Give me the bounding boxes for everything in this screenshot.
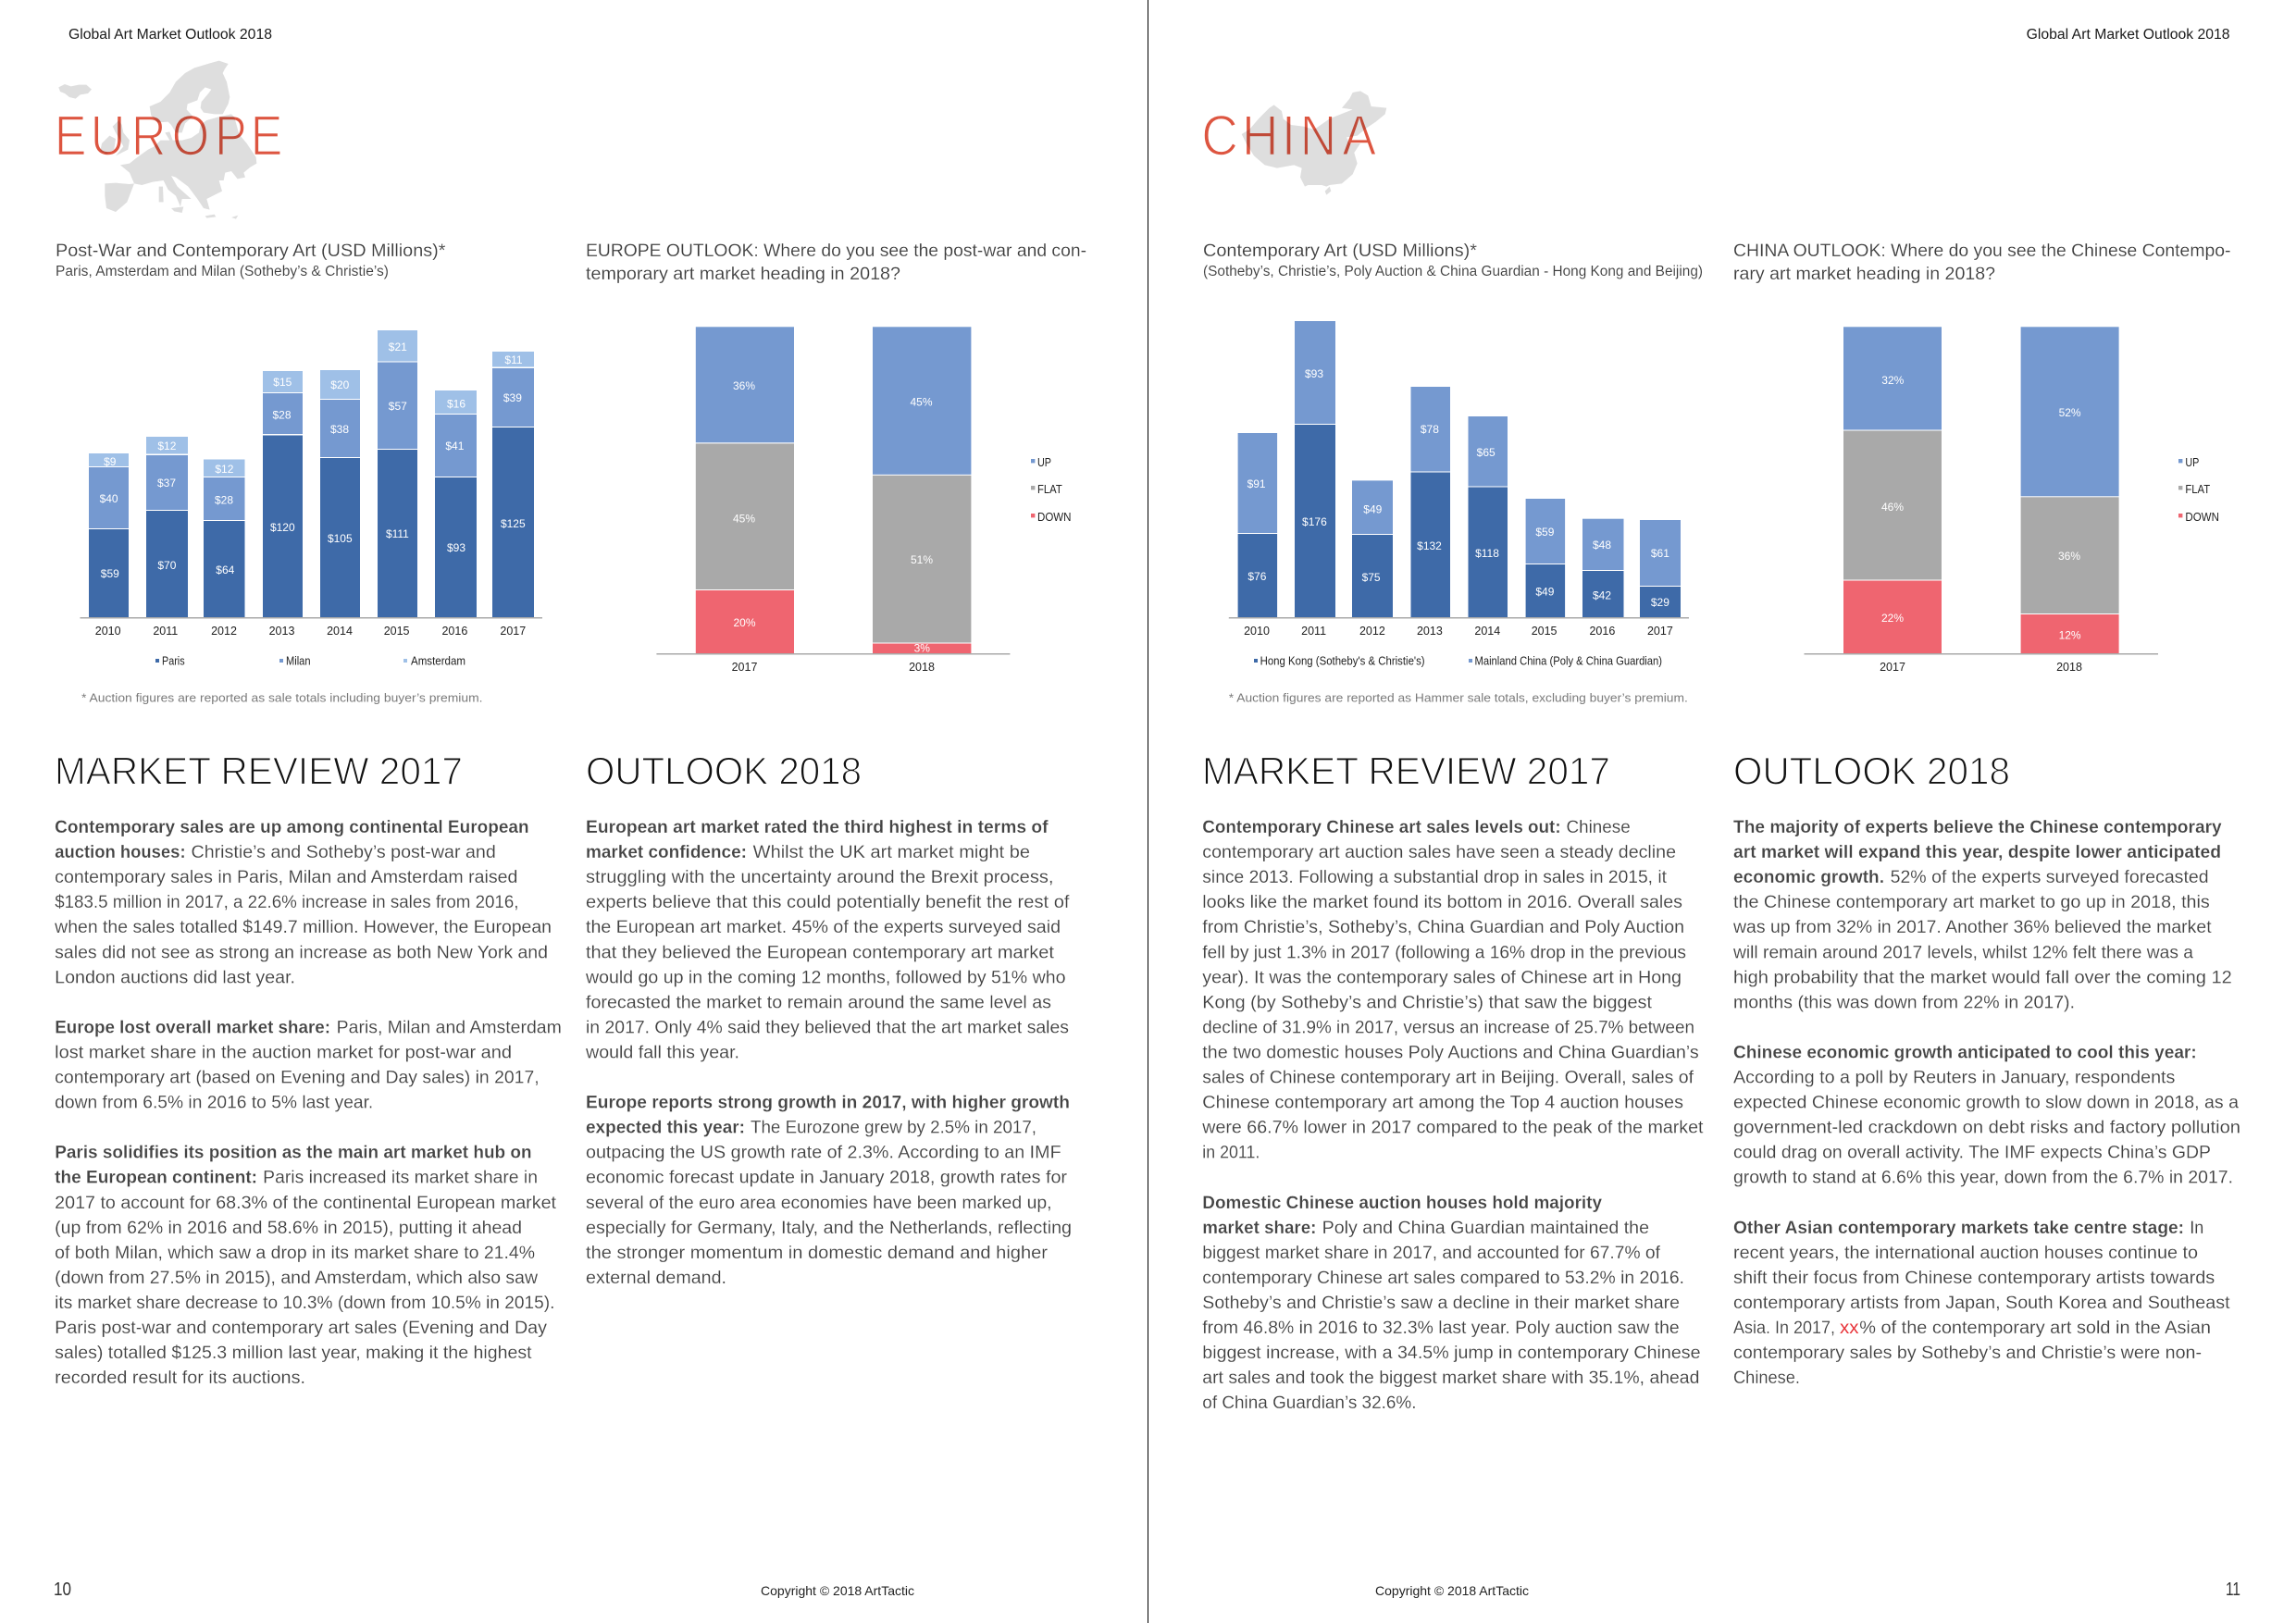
- legend: [2178, 456, 2219, 524]
- x axis with years: 2017: [1647, 625, 1673, 638]
- bar 2012: [1352, 480, 1393, 617]
- running header: Global Art Market Outlook 2018: [68, 27, 272, 43]
- paragraph: strong growth: [586, 1094, 1072, 1288]
- stacked bar chart: Europe sales by city: [80, 330, 542, 668]
- x axis with years: 2016: [1589, 625, 1615, 638]
- bar 2010: $40: [100, 492, 118, 505]
- paragraph: market confidence: the European art market. 45% of the experts surveyed said: [586, 918, 1061, 937]
- paragraph: domestic houses: from 46.8% in 2016 to 32.3% last year. Poly auction saw the: [1202, 1319, 1680, 1338]
- bar 2017: $29: [1651, 596, 1669, 609]
- bar 2018: 3%: [914, 642, 930, 655]
- bar 2010: $91: [1247, 477, 1266, 490]
- x axis with years: [1229, 617, 1689, 638]
- text block: China market review: [1201, 818, 1704, 1413]
- paragraph: majority of experts: was up from 32% in 2017. Another 36% believed the market: [1732, 918, 2212, 937]
- title: China: CHINA: [1201, 105, 1376, 167]
- paragraph: majority of experts: months (this was down from 22% in 2017).: [1733, 993, 2075, 1012]
- paragraph: sales level out: [1201, 818, 1704, 1163]
- paragraph: market confidence: struggling with the uncertainty around the Brexit process,: [586, 868, 1053, 887]
- x axis with years: 2011: [153, 625, 178, 638]
- running header: Global Art Market Outlook 2018: [2027, 27, 2230, 43]
- paragraph: domestic houses: biggest increase, with a 34.5% jump in contemporary Chinese: [1202, 1344, 1701, 1363]
- legend: DOWN: [2185, 511, 2219, 524]
- paragraph: Paris position: Paris solidifies its position as the main art market hub on: [55, 1144, 532, 1163]
- text block: China outlook: [1732, 818, 2240, 1388]
- bar 2017: 45%: [733, 512, 755, 525]
- page number 11: 11: [2226, 1580, 2240, 1600]
- bar 2017: [1640, 520, 1681, 617]
- paragraph: Paris position: [55, 1144, 557, 1388]
- paragraph: other Asian markets: xx: [1840, 1319, 1859, 1338]
- bar 2011: $37: [157, 477, 176, 489]
- bar 2017: $11: [504, 353, 523, 366]
- x axis with years: 2013: [1417, 625, 1443, 638]
- paragraph: Paris position: of both Milan, which saw a drop in its market share to 21.4%: [55, 1244, 535, 1263]
- x axis with years: 2018: [909, 661, 935, 674]
- bar 2017: 20%: [733, 616, 756, 629]
- bar 2014: [1468, 416, 1508, 617]
- paragraph: lost market share: Paris, Milan and Amsterdam: [337, 1018, 562, 1037]
- paragraph: contemporary sales: [54, 818, 552, 987]
- legend: DOWN: [1037, 511, 1072, 524]
- x axis with years: 2012: [211, 625, 237, 638]
- bar 2015: $21: [389, 341, 407, 353]
- paragraph: sales level out: Chinese: [1566, 818, 1631, 837]
- bar 2012: $64: [216, 564, 235, 576]
- bar 2015: $111: [386, 527, 409, 540]
- legend: UP: [2185, 456, 2199, 469]
- chart heading: Europe outlook: EUROPE OUTLOOK: Where do you see the post-war and con-: [586, 241, 1086, 261]
- paragraph: other Asian markets: contemporary sales by Sotheby’s and Christie’s were non-: [1733, 1344, 2202, 1363]
- bar 2014: $65: [1477, 446, 1496, 459]
- legend: Paris: [162, 655, 185, 668]
- chart heading: contemporary art: [1203, 241, 1703, 279]
- paragraph: majority of experts: high probability that the market would fall over the coming 12: [1733, 968, 2232, 987]
- bar 2016: $41: [445, 440, 465, 452]
- paragraph: contemporary sales: auction houses:: [55, 843, 186, 862]
- footnote: * Auction figures are reported as Hammer sale totals, excluding buyer’s premium.: [1229, 690, 1688, 705]
- bar 2011: $70: [157, 559, 177, 572]
- paragraph: strong growth: The Eurozone grew by 2.5% in 2017,: [751, 1119, 1036, 1138]
- chart heading: Europe outlook: [586, 241, 1086, 284]
- bar 2017: $125: [501, 517, 526, 530]
- bar 2014: [320, 370, 360, 617]
- bar 2016: [1582, 519, 1623, 617]
- paragraph: domestic houses: Domestic Chinese auction houses hold majority: [1202, 1194, 1602, 1213]
- icon: map of China: [1242, 91, 1386, 195]
- paragraph: market confidence: that they believed the European contemporary art market: [586, 943, 1055, 962]
- legend: UP: [1037, 456, 1051, 469]
- paragraph: Paris position: (up from 62% in 2016 and 58.6% in 2015), putting it ahead: [55, 1219, 522, 1238]
- paragraph: Paris position: its market share decrease to 10.3% (down from 10.5% in 2015).: [55, 1294, 554, 1313]
- paragraph: contemporary sales: sales did not see as strong an increase as both New York and: [55, 943, 548, 962]
- paragraph: sales level out: Chinese contemporary art among the Top 4 auction houses: [1202, 1094, 1683, 1113]
- heading: market review China: MARKET REVIEW 2017: [1202, 749, 1610, 792]
- copyright right: Copyright © 2018 ArtTactic: [1375, 1583, 1529, 1598]
- paragraph: lost market share: Europe lost overall market share:: [55, 1018, 330, 1037]
- bar 2018: [873, 327, 971, 655]
- x axis with years: 2017: [732, 661, 757, 674]
- paragraph: other Asian markets: recent years, the international auction houses continue to: [1733, 1244, 2198, 1263]
- paragraph: other Asian markets: Other Asian contemporary markets take centre stage:: [1733, 1219, 2184, 1238]
- heading: market review Europe: MARKET REVIEW 2017: [55, 749, 463, 792]
- paragraph: strong growth: expected this year:: [586, 1119, 745, 1138]
- x axis with years: 2017: [500, 625, 526, 638]
- paragraph: majority of experts: The majority of experts believe the Chinese contemporary: [1733, 818, 2222, 837]
- x axis with years: 2015: [384, 625, 410, 638]
- paragraph: Paris position: 2017 to account for 68.3% of the continental European market: [55, 1194, 557, 1213]
- paragraph: sales level out: looks like the market found its bottom in 2016. Overall sales: [1202, 893, 1682, 912]
- bar 2015: $59: [1535, 526, 1555, 539]
- paragraph: Paris position: the European continent:: [55, 1169, 257, 1188]
- x axis with years: 2014: [1474, 625, 1500, 638]
- x axis with years: 2017: [1880, 661, 1905, 674]
- paragraph: Paris position: (down from 27.5% in 2015), and Amsterdam, which also saw: [55, 1269, 538, 1288]
- icon: map of Europe: [58, 61, 256, 219]
- bar 2018: 36%: [2058, 550, 2080, 563]
- bar 2013: $15: [273, 376, 292, 389]
- paragraph: strong growth: economic forecast update in January 2018, growth rates for: [586, 1169, 1068, 1188]
- chart heading: contemporary art: (Sotheby’s, Christie’s, Poly Auction & China Guardian - Hong Kong and Beijing): [1203, 264, 1703, 279]
- paragraph: lost market share: lost market share in the auction market for post-war and: [55, 1043, 512, 1062]
- x axis with years: 2010: [95, 625, 121, 638]
- paragraph: majority of experts: art market will expand this year, despite lower anticipated: [1733, 843, 2221, 862]
- paragraph: market confidence: European art market rated the third highest in terms of: [586, 818, 1049, 837]
- x axis with years: 2018: [2056, 661, 2082, 674]
- paragraph: domestic houses: Sotheby’s and Christie’s saw a decline in their market share: [1202, 1294, 1680, 1313]
- legend: Milan: [286, 655, 311, 668]
- x axis with years: 2015: [1532, 625, 1558, 638]
- paragraph: sales level out: contemporary art auction sales have seen a steady decline: [1202, 843, 1676, 862]
- paragraph: sales level out: sales of Chinese contemporary art in Beijing. Overall, sales of: [1202, 1068, 1694, 1088]
- bar 2011: [1295, 321, 1335, 617]
- paragraph: contemporary sales: when the sales totalled $149.7 million. However, the European: [54, 918, 552, 937]
- paragraph: economic growth: growth to stand at 6.6% this year, down from the 6.7% in 2017.: [1733, 1169, 2233, 1188]
- bar 2018: 52%: [2059, 406, 2081, 419]
- paragraph: market confidence: market confidence:: [586, 843, 747, 862]
- paragraph: contemporary sales: Christie’s and Sotheby’s post-war and: [191, 843, 496, 862]
- x axis with years: [656, 653, 1010, 674]
- paragraph: majority of experts: 52% of the experts surveyed forecasted: [1891, 868, 2209, 887]
- paragraph: sales level out: year). It was the contemporary sales of Chinese art in Hong: [1202, 968, 1682, 987]
- bar 2012: $75: [1362, 571, 1381, 584]
- bar 2011: $12: [157, 440, 177, 452]
- bar 2010: [89, 453, 129, 617]
- paragraph: strong growth: Europe reports strong growth in 2017, with higher growth: [586, 1094, 1070, 1113]
- paragraph: other Asian markets: Asia. In 2017,: [1733, 1319, 1835, 1338]
- bar 2016: $16: [447, 397, 465, 410]
- paragraph: market confidence: forecasted the market to remain around the same level as: [586, 993, 1051, 1012]
- chart heading: China outlook: [1733, 241, 2230, 284]
- chart heading: post-war and contemporary art: [56, 241, 446, 279]
- paragraph: majority of experts: will remain around 2017 levels, whilst 12% felt there was a: [1732, 943, 2193, 962]
- bar 2017: 22%: [1881, 612, 1904, 625]
- paragraph: contemporary sales: Contemporary sales are up among continental European: [55, 818, 529, 837]
- bar 2013: [1410, 387, 1450, 617]
- paragraph: majority of experts: [1732, 818, 2232, 1012]
- bar 2017: 46%: [1881, 501, 1904, 514]
- paragraph: Paris position: Paris increased its market share in: [263, 1169, 538, 1188]
- paragraph: majority of experts: the Chinese contemporary art market to go up in 2018, this: [1733, 893, 2210, 912]
- paragraph: economic growth: According to a poll by Reuters in January, respondents: [1733, 1068, 2175, 1088]
- bar 2014: $38: [330, 423, 349, 436]
- paragraph: sales level out: decline of 31.9% in 2017, versus an increase of 25.7% between: [1202, 1018, 1694, 1037]
- x axis with years: 2016: [441, 625, 467, 638]
- chart heading: Europe outlook: temporary art market heading in 2018?: [586, 264, 900, 284]
- paragraph: sales level out: from Christie’s, Sotheby’s, China Guardian and Poly Auction: [1202, 918, 1684, 937]
- paragraph: sales level out: fell by just 1.3% in 2017 (following a 16% drop in the previous: [1202, 943, 1686, 962]
- footnote: * Auction figures are reported as sale totals including buyer’s premium.: [81, 690, 483, 705]
- bar 2013: $78: [1421, 423, 1439, 436]
- stacked bar chart: China sales: [1229, 321, 1689, 668]
- bar 2010: $9: [104, 455, 117, 468]
- paragraph: domestic houses: of China Guardian’s 32.6%.: [1202, 1394, 1416, 1413]
- bar 2017: 32%: [1881, 374, 1905, 387]
- bar 2011: $93: [1305, 367, 1323, 380]
- paragraph: strong growth: external demand.: [586, 1269, 726, 1288]
- legend: [1254, 655, 1662, 668]
- bar 2013: $28: [272, 408, 292, 421]
- paragraph: sales level out: were 66.7% lower in 2017 compared to the peak of the market: [1201, 1119, 1704, 1138]
- bar 2017: $39: [503, 391, 522, 404]
- paragraph: other Asian markets: shift their focus from Chinese contemporary artists towards: [1733, 1269, 2215, 1288]
- bar 2012: $28: [215, 493, 233, 506]
- paragraph: Paris position: recorded result for its auctions.: [55, 1369, 305, 1388]
- bar 2017: $61: [1651, 547, 1669, 560]
- legend: [155, 655, 465, 668]
- bar 2018: [2021, 327, 2119, 653]
- chart heading: China outlook: rary art market heading in 2018?: [1733, 264, 1995, 284]
- paragraph: majority of experts: economic growth.: [1733, 868, 1884, 887]
- x axis with years: 2012: [1359, 625, 1385, 638]
- panel: China page: [1201, 27, 2240, 1600]
- paragraph: economic growth: Chinese economic growth anticipated to cool this year:: [1733, 1043, 2197, 1062]
- paragraph: lost market share: [55, 1018, 562, 1113]
- paragraph: domestic houses: biggest market share in 2017, and accounted for 67.7% of: [1202, 1244, 1661, 1263]
- paragraph: sales level out: since 2013. Following a substantial drop in sales in 2015, it: [1202, 868, 1668, 887]
- paragraph: sales level out: the two domestic houses Poly Auctions and China Guardian’s: [1202, 1043, 1699, 1062]
- paragraph: domestic houses: Poly and China Guardian maintained the: [1322, 1219, 1649, 1238]
- paragraph: market confidence: would go up in the coming 12 months, followed by 51% who: [585, 968, 1066, 987]
- x axis with years: 2010: [1244, 625, 1270, 638]
- paragraph: sales level out: in 2011.: [1202, 1144, 1260, 1163]
- x axis with years: 2013: [269, 625, 294, 638]
- bar 2015: $49: [1535, 585, 1555, 598]
- paragraph: Paris position: sales) totalled $125.3 million last year, making it the highest: [55, 1344, 532, 1363]
- bar 2010: $76: [1247, 570, 1267, 583]
- stacked bar chart: China outlook: [1805, 327, 2219, 674]
- bar 2013: [263, 371, 303, 617]
- bar 2017: 36%: [733, 379, 755, 392]
- page number 10: 10: [54, 1580, 71, 1600]
- bar 2015: [378, 330, 417, 617]
- paragraph: other Asian markets: [1733, 1219, 2230, 1388]
- bar 2014: $118: [1475, 547, 1499, 560]
- paragraph: strong growth: especially for Germany, Italy, and the Netherlands, reflecting: [586, 1219, 1072, 1238]
- bar 2011: $176: [1302, 515, 1327, 528]
- x axis with years: 2011: [1301, 625, 1326, 638]
- bar 2017: [1843, 327, 1942, 653]
- bar 2015: [1526, 499, 1565, 617]
- bar 2010: [1238, 433, 1277, 617]
- panel: Europe page: [54, 27, 1086, 1600]
- paragraph: other Asian markets: contemporary artists from Japan, South Korea and Southeast: [1733, 1294, 2230, 1313]
- chart heading: post-war and contemporary art: Post-War and Contemporary Art (USD Millions)*: [56, 241, 446, 261]
- bar 2012: $12: [215, 463, 234, 476]
- bar 2011: [146, 437, 188, 617]
- paragraph: domestic houses: contemporary Chinese art sales compared to 53.2% in 2016.: [1202, 1269, 1684, 1288]
- paragraph: domestic houses: art sales and took the biggest market share with 35.1%, ahead: [1202, 1369, 1699, 1388]
- bar 2016: [435, 390, 477, 617]
- paragraph: market confidence: in 2017. Only 4% said they believed that the art market sales: [586, 1018, 1069, 1037]
- x axis with years: [80, 617, 542, 638]
- bar 2016: $93: [447, 541, 465, 554]
- bar 2013: $132: [1417, 539, 1442, 552]
- bar 2015: $57: [389, 400, 407, 413]
- paragraph: other Asian markets: In: [2190, 1219, 2203, 1238]
- legend: [1031, 456, 1072, 524]
- paragraph: economic growth: expected Chinese economic growth to slow down in 2018, as a: [1733, 1094, 2239, 1113]
- bar 2017: [492, 352, 534, 617]
- bar 2016: $42: [1593, 588, 1611, 601]
- paragraph: economic growth: could drag on overall activity. The IMF expects China’s GDP: [1733, 1144, 2211, 1163]
- paragraph: contemporary sales: contemporary sales in Paris, Milan and Amsterdam raised: [55, 868, 517, 887]
- paragraph: market confidence: Whilst the UK art market might be: [753, 843, 1030, 862]
- bar 2014: $20: [330, 378, 350, 391]
- legend: FLAT: [1037, 483, 1062, 496]
- chart heading: contemporary art: Contemporary Art (USD Millions)*: [1203, 241, 1477, 261]
- legend: Hong Kong (Sotheby's & Christie's): [1260, 655, 1425, 668]
- x axis with years: [1805, 653, 2158, 674]
- x axis with years: 2014: [327, 625, 353, 638]
- text block: Europe market review: [54, 818, 562, 1388]
- paragraph: lost market share: down from 6.5% in 2016 to 5% last year.: [55, 1094, 373, 1113]
- paragraph: domestic houses: [1202, 1194, 1701, 1413]
- bar 2018: 51%: [911, 553, 933, 566]
- bar 2018: 12%: [2059, 628, 2081, 641]
- bar 2018: 45%: [910, 395, 933, 408]
- chart heading: post-war and contemporary art: Paris, Amsterdam and Milan (Sotheby’s & Christie’s): [56, 264, 389, 279]
- paragraph: contemporary sales: London auctions did last year.: [55, 968, 295, 987]
- paragraph: economic growth: government-led crackdown on debt risks and factory pollution: [1733, 1119, 2240, 1138]
- stacked bar chart: Europe outlook: [656, 327, 1072, 674]
- paragraph: other Asian markets: % of the contemporary art sold in the Asian: [1859, 1319, 2211, 1338]
- paragraph: lost market share: contemporary art (based on Evening and Day sales) in 2017,: [55, 1068, 540, 1088]
- text block: Europe outlook: [585, 818, 1072, 1288]
- heading: outlook Europe: OUTLOOK 2018: [586, 749, 862, 792]
- paragraph: market confidence: [585, 818, 1070, 1062]
- heading: outlook China: OUTLOOK 2018: [1733, 749, 2010, 792]
- paragraph: sales level out: Contemporary Chinese art sales levels out:: [1202, 818, 1561, 837]
- paragraph: contemporary sales: $183.5 million in 2017, a 22.6% increase in sales from 2016,: [55, 893, 518, 912]
- bar 2013: $120: [270, 521, 295, 534]
- paragraph: other Asian markets: Chinese.: [1733, 1369, 1800, 1388]
- legend: Amsterdam: [411, 655, 465, 668]
- bar 2012: $49: [1363, 502, 1383, 515]
- title: Europe: EUROPE: [55, 105, 282, 167]
- chart heading: China outlook: CHINA OUTLOOK: Where do you see the Chinese Contempo-: [1733, 241, 2230, 261]
- paragraph: domestic houses: market share:: [1202, 1219, 1316, 1238]
- paragraph: strong growth: the stronger momentum in domestic demand and higher: [586, 1244, 1049, 1263]
- legend: Mainland China (Poly & China Guardian): [1475, 655, 1662, 668]
- bar 2012: [204, 459, 244, 617]
- bar 2014: $105: [328, 532, 353, 545]
- copyright left: Copyright © 2018 ArtTactic: [761, 1583, 914, 1598]
- bar 2010: $59: [101, 567, 119, 580]
- legend: FLAT: [2185, 483, 2210, 496]
- paragraph: Paris position: Paris post-war and contemporary art sales (Evening and Day: [55, 1319, 548, 1338]
- paragraph: strong growth: several of the euro area economies have been marked up,: [586, 1194, 1052, 1213]
- paragraph: market confidence: would fall this year.: [585, 1043, 739, 1062]
- bar 2016: $48: [1593, 539, 1611, 551]
- paragraph: strong growth: outpacing the US growth rate of 2.3%. According to an IMF: [586, 1144, 1061, 1163]
- bar 2017: [696, 327, 794, 653]
- paragraph: market confidence: experts believe that this could potentially benefit the rest of: [586, 893, 1070, 912]
- paragraph: economic growth: [1733, 1043, 2240, 1188]
- paragraph: sales level out: Kong (by Sotheby’s and Christie’s) that saw the biggest: [1202, 993, 1653, 1012]
